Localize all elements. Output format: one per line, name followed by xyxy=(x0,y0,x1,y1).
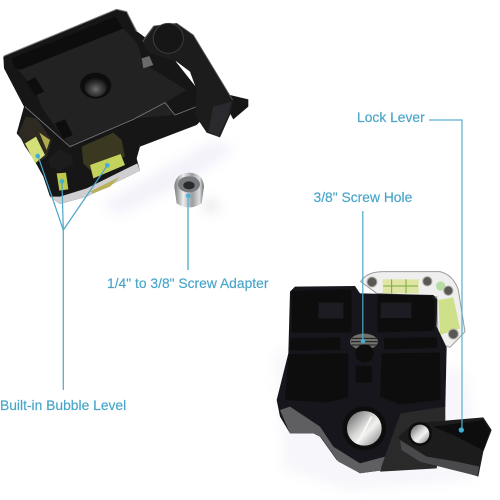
target dot xyxy=(186,194,191,198)
level vial: top xyxy=(383,279,419,293)
front edge and clear base xyxy=(50,163,140,204)
leader line: lock lever xyxy=(429,120,462,428)
compartment: top left xyxy=(291,289,352,333)
compartment: lower left xyxy=(285,353,348,403)
label: lock lever: Lock Lever xyxy=(357,109,425,125)
adapter thread xyxy=(178,176,200,192)
blue target dots xyxy=(35,154,40,158)
product: upper clamp plate xyxy=(3,9,248,204)
leader lines: built-in bubble level xyxy=(38,156,107,390)
rear lever tip xyxy=(230,95,248,119)
lever pivot disc xyxy=(153,23,183,53)
recessed top face xyxy=(18,28,187,147)
compartment: top right xyxy=(377,295,435,333)
plate screws xyxy=(367,277,458,339)
under-body behind lever xyxy=(380,405,445,472)
clear bubble level plate xyxy=(361,272,465,347)
blue target dot: hole xyxy=(361,339,365,343)
level window: front post xyxy=(48,149,73,172)
rim recess xyxy=(12,17,123,69)
blue target dot: lever xyxy=(459,427,464,433)
center screw hole thread xyxy=(350,334,378,350)
leader line: screw adapter xyxy=(187,196,189,270)
lever screw xyxy=(408,422,432,446)
lever xyxy=(398,417,492,477)
base screw xyxy=(342,406,386,450)
label: screw adapter: 1/4" to 3/8" Screw Adapter xyxy=(107,275,269,291)
compartment: lower right xyxy=(380,353,441,405)
level window: left xyxy=(18,117,52,163)
threaded mounting hole xyxy=(80,73,111,99)
bubble level: right xyxy=(90,154,125,178)
lever xyxy=(142,23,233,137)
base body xyxy=(277,286,447,473)
bubble level: left xyxy=(25,137,45,163)
product: lower clamp base xyxy=(277,272,492,477)
clamp body xyxy=(3,9,200,204)
level vial: side xyxy=(438,297,460,335)
level window: right xyxy=(82,133,125,170)
product: screw adapter xyxy=(174,173,204,207)
compartment: middle strips xyxy=(289,337,437,351)
adapter shell xyxy=(174,173,204,207)
leader line: screw hole xyxy=(362,211,364,341)
label: bubble level: Built-in Bubble Level xyxy=(0,397,126,413)
label: 3/8 screw hole: 3/8" Screw Hole xyxy=(314,189,413,205)
soft shadows xyxy=(100,140,475,490)
